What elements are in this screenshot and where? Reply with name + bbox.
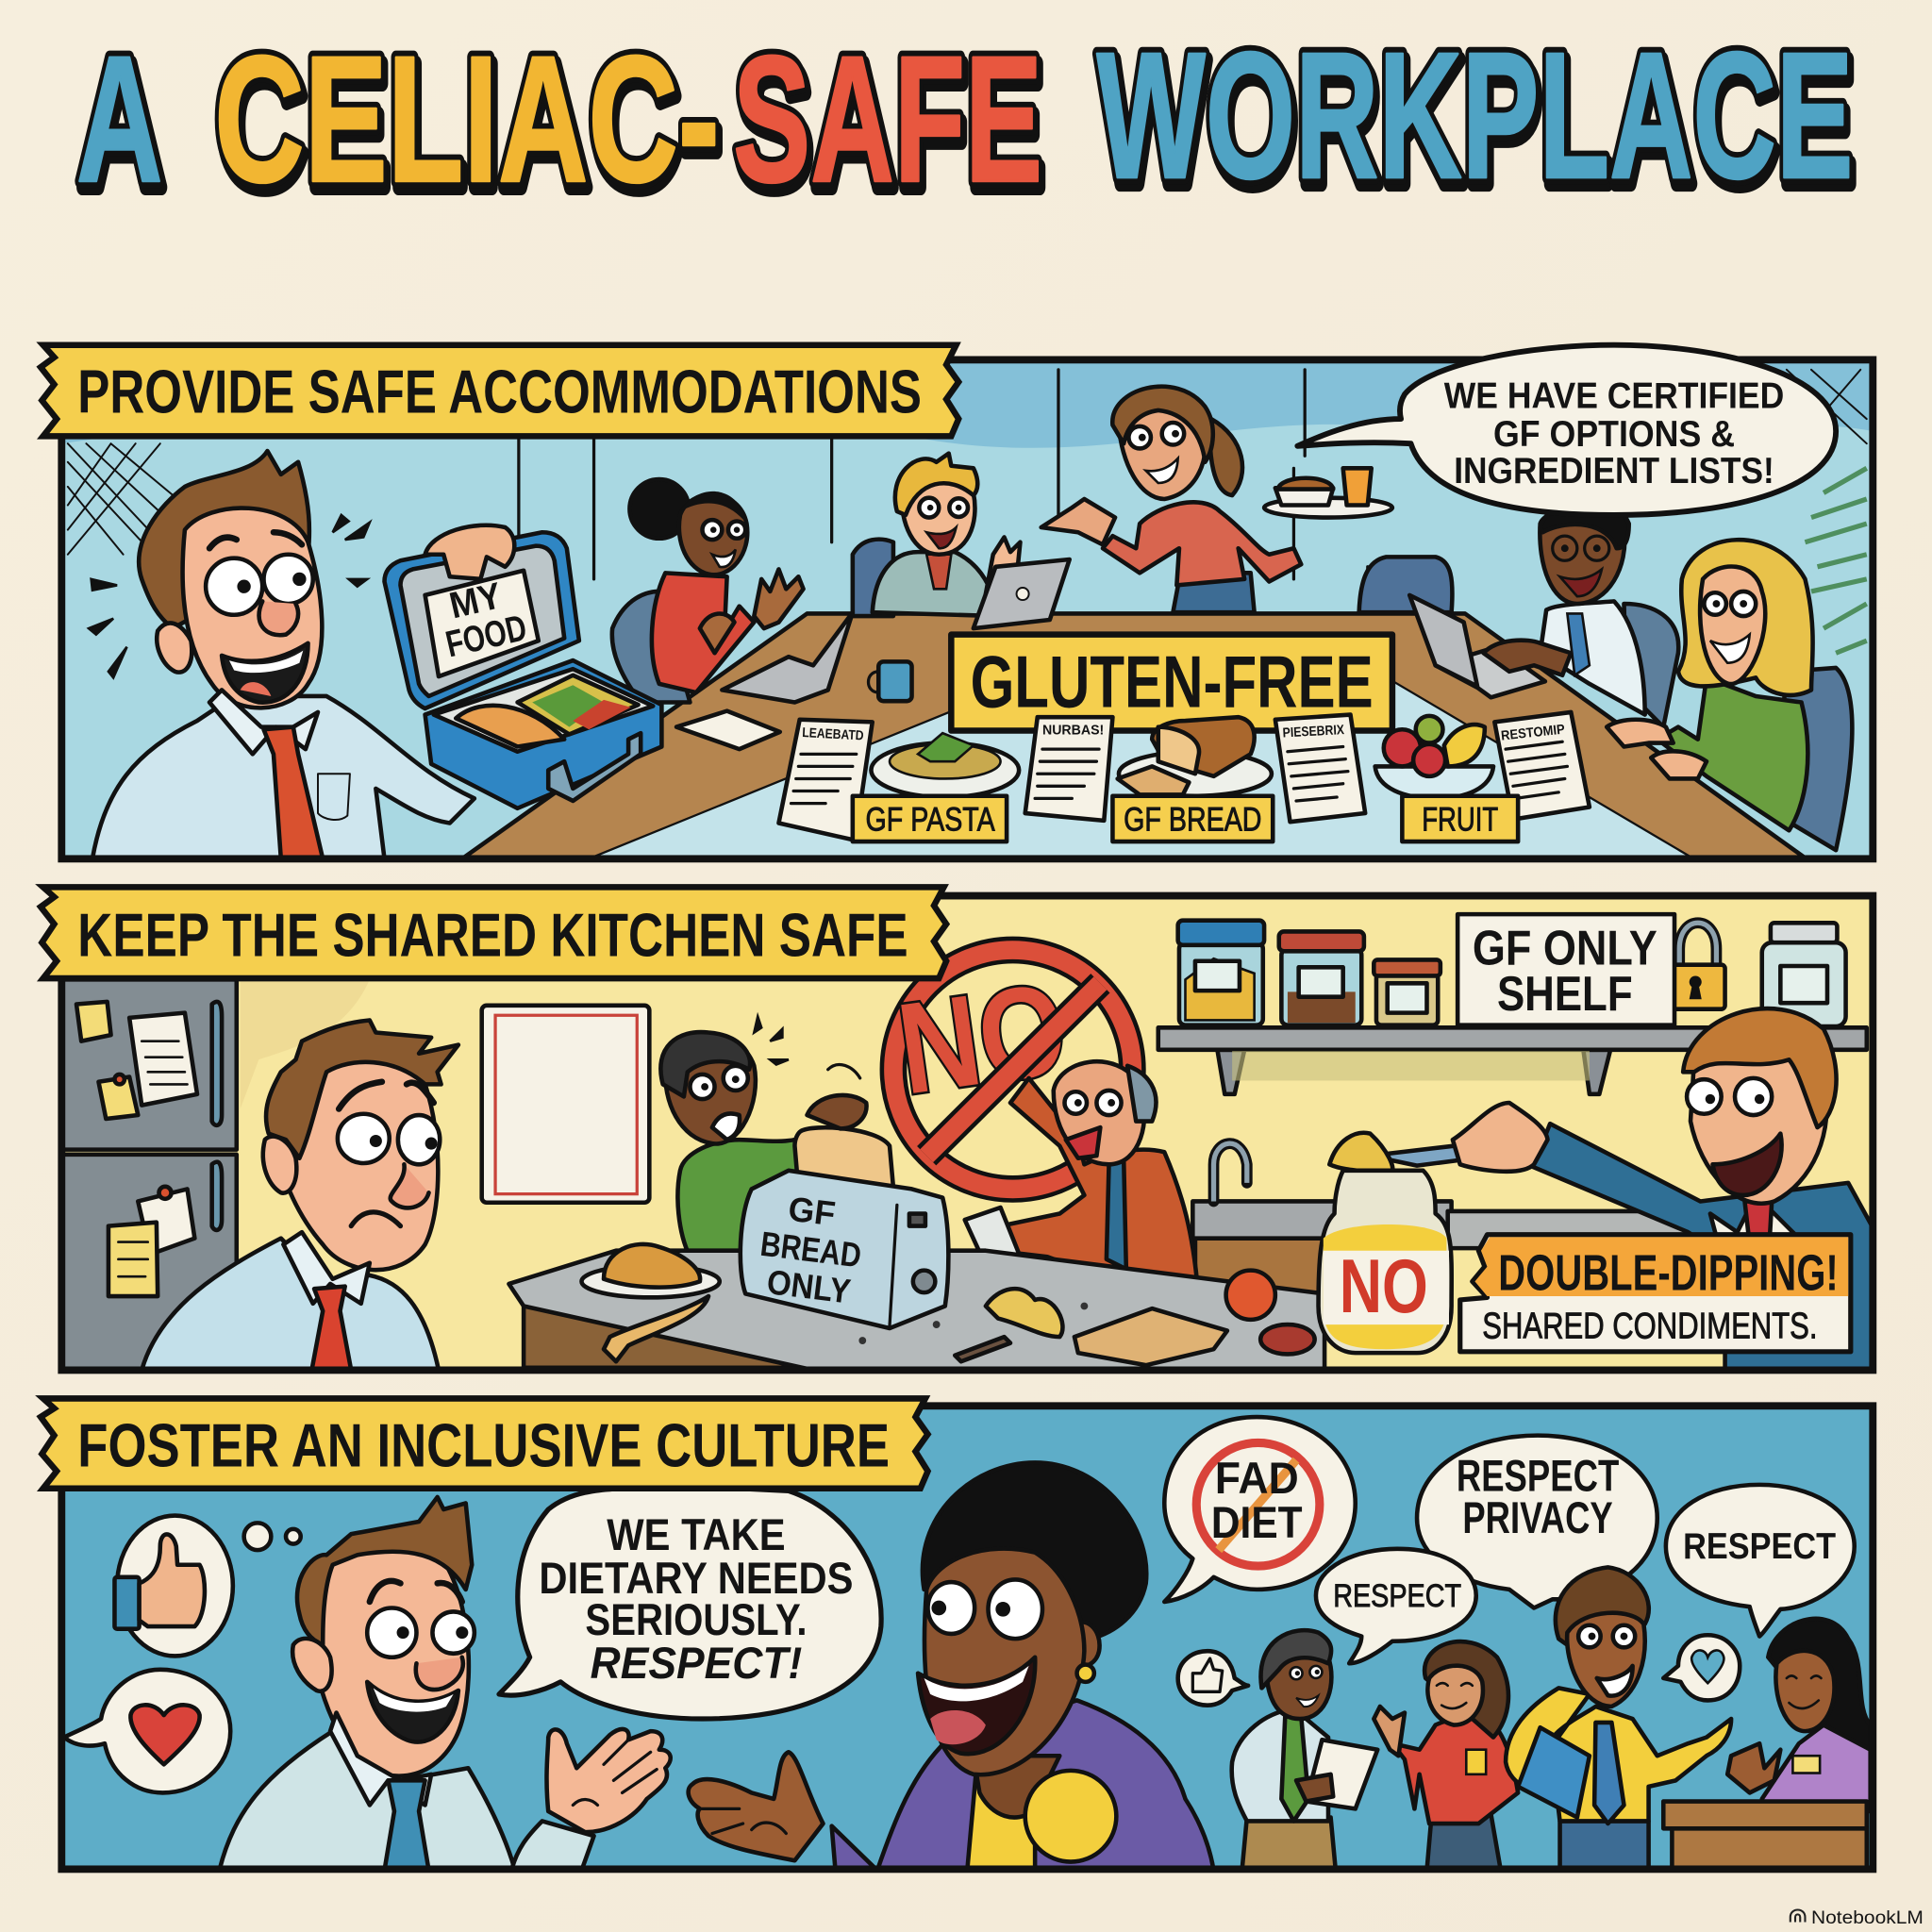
gluten-free sign: GLUTEN-FREE xyxy=(971,641,1374,724)
label: fruit: FRUIT xyxy=(1422,801,1498,838)
banner: keep the shared kitchen safe: KEEP THE SHARED KITCHEN SAFE xyxy=(77,901,908,970)
panel: foster an inclusive culture xyxy=(61,1406,1873,1873)
no symbol sign: NO xyxy=(890,957,1074,1123)
speech bubble: dietary needs xyxy=(499,1485,881,1719)
menu card 4 xyxy=(1494,712,1590,820)
mug xyxy=(868,661,912,701)
panel frame xyxy=(61,1406,1873,1869)
menu card 1: LEAEBATD xyxy=(802,725,864,743)
lunch box: MY xyxy=(446,575,506,626)
bubble text: DIETARY NEEDS xyxy=(539,1553,853,1603)
small bubble: heart xyxy=(1663,1635,1740,1700)
menu card 1 xyxy=(778,720,873,841)
speech bubble: respect privacy: PRIVACY xyxy=(1462,1492,1613,1542)
empty chair xyxy=(1359,557,1452,612)
speech bubble: respect right xyxy=(1666,1485,1855,1637)
jar small xyxy=(1374,959,1441,1025)
jar clear xyxy=(1762,923,1846,1026)
mess on counter xyxy=(858,1289,1088,1361)
toaster: BREAD xyxy=(758,1224,863,1275)
person: woman at desk xyxy=(1727,1619,1871,1811)
bubble text xyxy=(1444,375,1784,491)
person: worried man in green xyxy=(660,1017,860,1257)
person: sad man xyxy=(142,1020,458,1370)
mayo jar: NO xyxy=(1340,1244,1428,1329)
laptop left xyxy=(722,612,853,702)
fridge xyxy=(61,979,237,1370)
bubble text: WE HAVE CERTIFIED xyxy=(1444,375,1784,416)
speech bubble: respect left xyxy=(1316,1549,1476,1663)
person: blond man with laptop xyxy=(853,454,1020,616)
toaster: GF xyxy=(786,1190,838,1233)
padlock xyxy=(1666,923,1725,1009)
food: bread xyxy=(1118,717,1272,796)
sign: gf only shelf xyxy=(1457,914,1674,1025)
label: fruit xyxy=(1402,796,1518,841)
gluten-free sign xyxy=(951,635,1392,731)
person: man with beard and paper xyxy=(1232,1630,1377,1871)
lunch box xyxy=(385,532,661,808)
small bubble: thumbs up xyxy=(1178,1651,1248,1706)
toaster xyxy=(741,1095,948,1328)
blank poster xyxy=(482,1006,649,1203)
bubble text: GF OPTIONS & xyxy=(1493,414,1735,455)
speech bubble: heart xyxy=(64,1670,230,1792)
thought bubble: thumbs up xyxy=(114,1516,301,1656)
callout: double dipping xyxy=(1460,1235,1851,1352)
label: gf pasta xyxy=(853,796,1007,841)
plant xyxy=(1805,468,1867,653)
speech bubble: fad diet xyxy=(1164,1417,1356,1602)
bubble text xyxy=(539,1509,853,1688)
sign: gf only shelf: GF ONLY xyxy=(1473,922,1657,976)
banner: provide safe accommodations: PROVIDE SAFE ACCOMMODATIONS xyxy=(77,358,922,426)
label: gf bread: GF BREAD xyxy=(1124,801,1261,838)
title: CELIAC- xyxy=(214,19,720,220)
hand on lid xyxy=(425,525,514,579)
menu card 2 xyxy=(1025,717,1112,821)
banner: provide safe accommodations xyxy=(41,345,958,436)
title: A xyxy=(79,25,165,226)
menu card 4: RESTOMIP xyxy=(1500,723,1566,744)
jar red lid xyxy=(1279,931,1364,1025)
food: pasta xyxy=(871,733,1019,797)
person: smiling man xyxy=(219,1497,671,1871)
food: fruit bowl xyxy=(1375,716,1493,798)
tray with food xyxy=(1264,468,1392,518)
person: smiling woman in purple xyxy=(689,1462,1214,1871)
label: gf pasta: GF PASTA xyxy=(866,801,995,838)
knife with mayo xyxy=(1329,1103,1547,1174)
bubble text: SERIOUSLY. xyxy=(585,1594,808,1644)
toast on counter xyxy=(1074,1308,1227,1365)
menu card 2: NURBAS! xyxy=(1042,723,1104,738)
lunch box: FOOD xyxy=(442,608,530,665)
bubble text: INGREDIENT LISTS! xyxy=(1454,451,1774,491)
person: woman in red xyxy=(1374,1641,1518,1871)
bubble text: RESPECT! xyxy=(591,1638,802,1688)
person: man holding lunch box xyxy=(92,451,475,858)
shelf xyxy=(1158,1027,1867,1094)
panel: provide safe accommodations xyxy=(61,345,1873,858)
no symbol sign xyxy=(890,950,1132,1189)
speech bubble: respect right: RESPECT xyxy=(1683,1526,1836,1567)
title: SAFE xyxy=(733,19,1042,220)
person: blonde woman in green xyxy=(1607,540,1852,850)
callout: double dipping: SHARED CONDIMENTS. xyxy=(1482,1306,1818,1346)
label: gf bread xyxy=(1112,796,1273,841)
title: SAFE xyxy=(736,25,1045,226)
menu card 3 xyxy=(1275,715,1365,822)
peach xyxy=(1226,1271,1275,1320)
panel frame xyxy=(61,359,1873,858)
laptop centre xyxy=(974,559,1070,628)
toaster: ONLY xyxy=(765,1262,853,1311)
speech bubble: respect privacy xyxy=(1417,1436,1657,1607)
banner: keep the shared kitchen safe xyxy=(41,887,946,978)
mayo jar xyxy=(1319,1171,1452,1353)
person: man double dipping xyxy=(1533,1008,1875,1370)
menu card 3: PIESEBRIX xyxy=(1282,723,1345,741)
speech bubble: fad diet: FAD xyxy=(1215,1453,1299,1503)
red lid xyxy=(1260,1324,1315,1354)
conference table xyxy=(462,613,1807,858)
title: CELIAC- xyxy=(214,19,720,220)
sign: gf only shelf: SHELF xyxy=(1497,967,1633,1022)
title: SAFE xyxy=(733,19,1042,220)
person: man in yellow shirt xyxy=(1506,1567,1731,1871)
title: A xyxy=(76,19,162,220)
notebooklm watermark: NotebookLM xyxy=(1811,1907,1924,1928)
speech bubble: respect privacy: RESPECT xyxy=(1457,1450,1619,1500)
speech bubble: fad diet: DIET xyxy=(1211,1497,1303,1547)
jar blue lid xyxy=(1178,921,1264,1025)
spilled crust xyxy=(604,1296,708,1361)
laptop right xyxy=(1409,595,1571,697)
papers xyxy=(676,711,780,749)
motion marks xyxy=(89,515,370,677)
panel: keep the shared kitchen safe xyxy=(61,896,1875,1370)
banner: foster an inclusive culture xyxy=(41,1398,928,1489)
person: woman in red sweater xyxy=(612,479,804,702)
reception desk xyxy=(1663,1802,1867,1873)
banner: foster an inclusive culture: FOSTER AN INCLUSIVE CULTURE xyxy=(77,1410,890,1479)
person: angry man xyxy=(965,1061,1198,1288)
speech bubble: respect left: RESPECT xyxy=(1333,1578,1461,1614)
kitchen counter xyxy=(508,1251,1324,1370)
back counter and sink xyxy=(1192,1143,1743,1300)
bread loaf on plate xyxy=(581,1244,720,1297)
title xyxy=(76,15,1856,226)
title: A xyxy=(76,19,162,220)
panel frame xyxy=(61,896,1873,1370)
bubble text: WE TAKE xyxy=(607,1509,786,1559)
title: CELIAC- xyxy=(217,25,722,226)
speech bubble: certified options xyxy=(1297,345,1836,515)
person: standing woman with tray xyxy=(1041,387,1301,612)
person: man with glasses xyxy=(1540,501,1678,727)
